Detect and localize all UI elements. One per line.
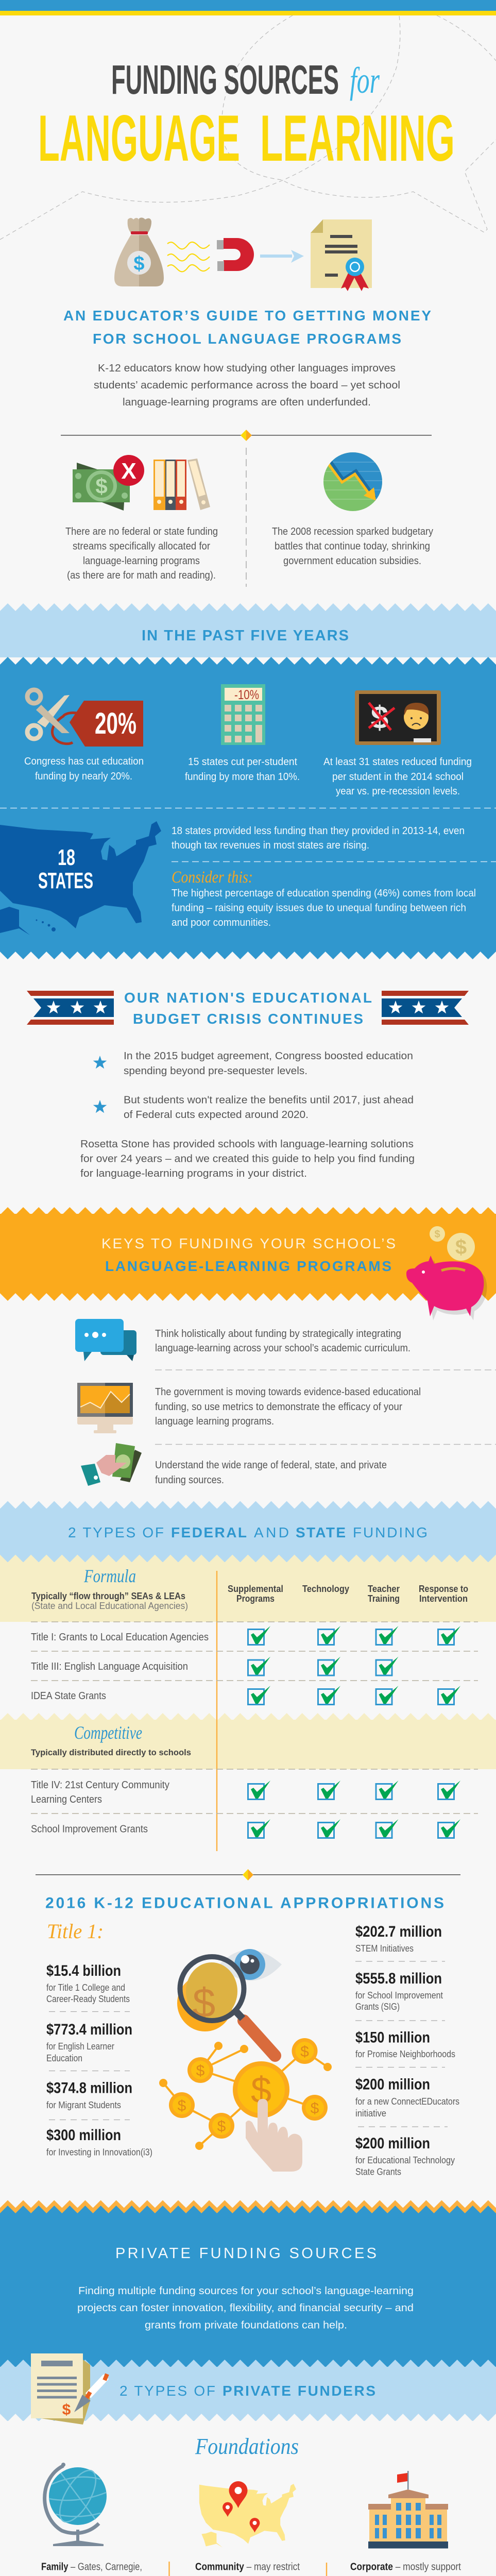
list: right amounts: initiative [355,2108,386,2119]
panel: 2 types of federal and state funding [0,1501,496,1622]
competitive band: Competitive [74,1722,142,1743]
text: understand range: funding sources. [155,1475,224,1486]
panel: private funding sources [0,2200,496,2368]
formula label: (State and Local Educational Agencies) [31,1601,188,1611]
list: left amounts: for English Learner [46,2041,114,2052]
icon: calculator: -10% [234,688,259,702]
callout: consider this: Consider this: [172,868,253,887]
panel: in the past five years [0,603,496,959]
text: no funding streams: There are no federal or state funding [65,526,218,537]
table row labels: Title IV: 21st Century Community [31,1780,169,1791]
text: evidence based: language learning programs. [155,1416,274,1427]
list: right amounts: $555.8 million [355,1970,442,1987]
text: three cuts: year vs. pre-recession levels. [336,786,460,797]
text: three cuts [24,756,472,797]
title [38,57,455,175]
text: 2008 recession: government education subsidies. [283,555,421,567]
competitive band: Typically distributed directly to schools [31,1748,191,1757]
list: left amounts: for Title 1 College and [46,1982,125,1993]
coin network: $ [300,2043,309,2060]
list: left amounts [46,1962,152,2158]
heading: FEDERAL [171,1524,247,1540]
table column headers: Teacher [368,1584,400,1594]
icon: blackboard: $ [371,700,388,736]
icon: no funding money: $ [95,474,108,498]
icon: blackboard [355,690,441,745]
intro paragraph: students’ academic performance across the board – yet school [94,380,400,391]
title: for [350,60,380,101]
text: rosetta stone intro: Rosetta Stone has provided schools with language-learning solutions [80,1139,414,1150]
heading: PRIVATE FUNDERS [223,2383,375,2399]
heading: FUNDING [353,1524,427,1540]
list: budget bullets: of Federal cuts expected around 2020. [124,1109,309,1121]
callout: consider this [172,868,476,928]
icon: piggy bank [406,1226,487,1320]
callout: consider this: funding – raising equity issues due to unequal funding between rich [172,903,466,914]
icon: certificate [311,219,372,291]
text: no funding streams: (as there are for math and reading). [67,570,216,581]
list: budget bullets: But students won't realize the benefits until 2017, just ahead [124,1094,414,1106]
formula label: Formula [83,1566,136,1586]
coin network: $ [196,2062,205,2079]
coin network: $ [311,2100,319,2117]
text: 2008 recession: The 2008 recession sparked budgetary [272,526,433,537]
eye [218,1949,282,1981]
list: right amounts: for Promise Neighborhoods [355,2049,455,2059]
text: 2008 recession: battles that continue today, shrinking [275,541,430,552]
list: budget bullets: In the 2015 budget agreement, Congress boosted education [124,1050,413,1062]
icon: US map with pins [199,2481,296,2548]
hand [246,2099,302,2172]
callout: consider this: The highest percentage of education spending (46%) comes from local [172,888,476,899]
heading: 2 TYPES OF [68,1524,164,1540]
text: 18 states: 18 states provided less funding than they provided in 2013-14, even [172,825,465,837]
icon: piggy bank: $ [455,1236,467,1259]
table row labels: Title III: English Language Acquisition [31,1661,188,1672]
formula label [31,1566,188,1611]
intro paragraph: K-12 educators know how studying other languages improves [98,363,396,374]
heading: LANGUAGE-LEARNING PROGRAMS [105,1258,391,1274]
table column headers: Response to [419,1584,468,1594]
formula label: Typically “flow through” SEAs & LEAs [31,1591,185,1601]
list: left amounts: Education [46,2053,82,2063]
table column headers: Programs [236,1594,275,1604]
text: three cuts: 15 states cut per-student [188,756,297,768]
list: left amounts: Career-Ready Students [46,1994,130,2004]
text: no funding streams: language-learning programs [83,555,200,567]
text: three cuts: funding by more than 10%. [185,771,300,783]
competitive band [0,1713,496,1769]
table row labels: Learning Centers [31,1794,102,1805]
list: left amounts: $300 million [46,2127,121,2144]
text: rosetta stone intro: for language-learning programs in your district. [80,1168,307,1179]
text: 18 states: though tax revenues in most states are rising. [172,840,369,851]
text: three cuts: funding by nearly 20%. [35,771,132,782]
panel: keys to funding [0,1207,496,1320]
icon: monitor [77,1383,133,1433]
coin under magnifier [177,1962,237,2031]
text: 18 states [172,825,465,851]
list: right amounts: $200 million [355,2076,430,2093]
table row labels: School Improvement Grants [31,1824,148,1835]
subtitle: FOR SCHOOL LANGUAGE PROGRAMS [93,331,401,347]
icon: money bag [114,217,164,286]
text: 2008 recession [272,526,433,567]
icon: grant document and pen [31,2353,107,2425]
heading [68,1524,427,1540]
icon: attraction waves [167,242,210,272]
table column headers: Intervention [419,1594,468,1604]
heading: PRIVATE FUNDING SOURCES [115,2245,377,2262]
list: right amounts: $200 million [355,2135,430,2152]
coin network links [163,2046,328,2146]
subtitle: AN EDUCATOR’S GUIDE TO GETTING MONEY [63,308,431,324]
list: right amounts: for School Improvement [355,1990,443,2001]
table row labels: Title I: Grants to Local Education Agencies [31,1632,209,1643]
text: three cuts: Congress has cut education [24,756,144,767]
text: corporate foundations: Corporate – mostly support [350,2562,461,2573]
coin under magnifier: $ [193,1980,215,2026]
list: left amounts: $374.8 million [46,2079,132,2097]
title: LANGUAGE [38,101,240,175]
text: no funding streams [65,526,218,581]
icon: binders [153,459,210,510]
text: understand range: Understand the wide range of federal, state, and private [155,1460,387,1471]
divider [61,430,432,441]
list: right amounts: for a new ConnectEDucators [355,2096,459,2107]
list: right amounts: Grants (SIG) [355,2002,400,2012]
heading: budget crisis: BUDGET CRISIS CONTINUES [133,1011,363,1027]
icon: magnet [217,238,254,271]
list: budget bullets: spending beyond pre-sequester levels. [124,1065,307,1077]
paragraph: Finding multiple funding sources for your school’s language-learning [78,2285,414,2297]
table check marks [248,1626,460,1838]
heading: 2 TYPES OF [119,2383,215,2399]
callout: consider this: and poor communities. [172,917,271,928]
text: evidence based: funding, so use metrics to demonstrate the efficacy of your [155,1401,402,1413]
icon: no funding money [73,455,144,511]
text: think holistically [155,1328,411,1354]
table column headers [228,1584,468,1604]
text: family foundations: Family – Gates, Carnegie, [41,2562,142,2573]
heading: STATE [296,1524,346,1540]
icon: falling chart [323,452,382,511]
map: 18 states: 18 [58,845,75,870]
text: three cuts: At least 31 states reduced funding [323,756,472,768]
list: left amounts: for Investing in Innovation(i3) [46,2147,152,2158]
icon: chat bubbles [75,1319,136,1361]
icon: grant document and pen: $ [62,2401,71,2418]
heading [119,2383,375,2399]
heading: AND [254,1524,289,1540]
text: community foundations: Community – may restrict [195,2562,300,2573]
text: understand range [155,1460,387,1486]
text: evidence based: The government is moving towards evidence-based educational [155,1386,421,1398]
heading: appropriations: 2016 K-12 EDUCATIONAL APPROPRIATIONS [45,1895,444,1911]
list: right amounts: $202.7 million [355,1923,442,1940]
coin network: $ [178,2097,186,2114]
heading: IN THE PAST FIVE YEARS [142,628,349,644]
list: right amounts: $150 million [355,2029,430,2046]
heading: foundations: Foundations [195,2434,299,2459]
subtitle [63,308,431,347]
heading: budget crisis [124,990,372,1027]
panel: 2 types of private funders [0,2353,496,2425]
table row labels [31,1632,209,1835]
icon: piggy bank: $ [434,1229,440,1240]
icon: globe [45,2463,107,2546]
paragraph [77,2285,414,2331]
illustration: eye, magnifier, coins and hand [159,1949,332,2172]
speech bubble outlines [0,15,496,240]
magnifier [180,1957,275,2056]
top colour bars [0,0,496,15]
icon: scissors and price tag: 20% [95,707,136,740]
list: right amounts: STEM Initiatives [355,1943,414,1954]
list: right amounts [355,1923,459,2177]
list: left amounts: $773.4 million [46,2021,132,2038]
text: rosetta stone intro [80,1139,415,1179]
text: think holistically: Think holistically about funding by strategically integrating [155,1328,401,1340]
table column headers: Supplemental [228,1584,283,1594]
icon: money bag: $ [133,253,145,275]
list: left amounts: $15.4 billion [46,1962,121,1979]
icon: hand with money [81,1443,142,1486]
banner: star ribbons [27,991,469,1025]
list: budget bullets [93,1050,414,1121]
table column headers: Training [368,1594,400,1604]
table column headers: Technology [302,1584,349,1594]
coin network: $ [217,2118,226,2135]
list: right amounts: for Educational Technology [355,2155,455,2165]
arrow [260,250,304,263]
coin network [159,2038,332,2150]
coin network: $ [251,2070,271,2111]
map: 18 states [0,821,161,935]
heading: budget crisis: OUR NATION'S EDUCATIONAL [124,990,372,1006]
text: no funding streams: streams specifically allocated for [73,541,210,552]
paragraph: projects can foster innovation, flexibility, and financial security – and [77,2302,414,2314]
heading [101,1235,396,1274]
divider [36,1869,460,1880]
intro paragraph: language-learning programs are often underfunded. [123,397,371,408]
intro paragraph [94,363,400,408]
icon: scissors and price tag [27,690,143,747]
text: three cuts: per student in the 2014 school [332,771,464,783]
map: 18 states: STATES [38,868,93,893]
heading: KEYS TO FUNDING YOUR SCHOOL’S [101,1235,396,1251]
icon: corporate building [368,2471,448,2548]
text: evidence based [155,1386,421,1427]
paragraph: grants from private foundations can help. [145,2319,347,2331]
text: rosetta stone intro: for over 24 years – and we created this guide to help you find funding [80,1153,415,1164]
text: think holistically: language-learning across your school’s academic curriculum. [155,1343,411,1354]
list: left amounts: for Migrant Students [46,2100,121,2110]
table row labels: IDEA State Grants [31,1690,106,1702]
icon: calculator [221,684,265,745]
icon: no funding money: X [121,459,136,484]
title 1 label: Title 1: [47,1920,104,1943]
list: right amounts: State Grants [355,2167,401,2177]
